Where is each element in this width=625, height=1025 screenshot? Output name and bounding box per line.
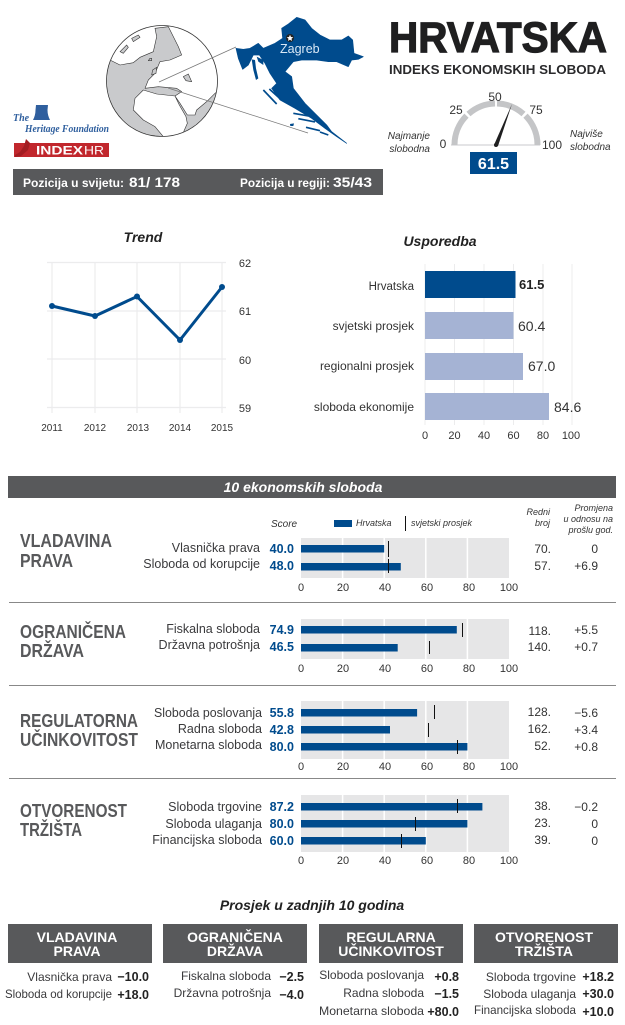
panel: Regularna učinkovitost average: +0.8 [434, 970, 459, 984]
group: Regulatorna učinkovitost: 0 [298, 761, 304, 773]
group: Ograničena država: OGRANIČENA [20, 621, 126, 642]
position bar: 81/ 178 [129, 174, 180, 190]
logo: The Heritage Foundation: Heritage Foundation [24, 124, 109, 135]
panel: Ograničena država average: OGRANIČENA [187, 928, 283, 945]
group: Regulatorna učinkovitost [20, 701, 598, 773]
bar chart: comparison: 0 [422, 430, 428, 442]
group: Ograničena država: 100 [500, 663, 518, 675]
divider [9, 602, 616, 604]
column headers: prošlu god. [567, 525, 613, 535]
column headers [526, 503, 613, 535]
panel: Otvorenost tržišta average [474, 924, 618, 1019]
bar chart: comparison: 100 [562, 430, 580, 442]
group: Vladavina prava: Sloboda od korupcije [143, 557, 260, 571]
panel: Regularna učinkovitost average: UČINKOVITOST [338, 942, 444, 959]
panel: Regularna učinkovitost average: Sloboda poslovanja [319, 968, 424, 982]
panel: Vladavina prava average: Vlasnička prava [27, 970, 112, 984]
group: Vladavina prava: Vlasnička prava [172, 541, 260, 555]
group: Vladavina prava: 0 [591, 542, 598, 556]
panel: Regularna učinkovitost average: REGULARNA [346, 929, 436, 945]
bar chart: comparison: sloboda ekonomije [314, 400, 414, 414]
group: Vladavina prava: +6.9 [574, 559, 598, 573]
panel: Vladavina prava average: PRAVA [54, 943, 100, 959]
panel: Regularna učinkovitost average: Monetarna sloboda [319, 1004, 424, 1018]
line chart: trend: 2015 [211, 423, 234, 434]
group: Vladavina prava: 48.0 [270, 559, 294, 573]
group: Ograničena država: 60 [421, 663, 433, 675]
group: Vladavina prava [20, 531, 598, 594]
logo: Index HR: HR [84, 144, 104, 158]
heading: Trend: Trend [124, 229, 163, 245]
gauge: index score 61.5: slobodna [570, 142, 611, 153]
gauge: index score 61.5: 61.5 [478, 156, 509, 173]
gauge: index score 61.5: Najviše [570, 129, 603, 140]
bar chart: comparison: 40 [478, 430, 490, 442]
line chart: trend: 62 [239, 258, 251, 270]
legend: Hrvatska [356, 518, 392, 528]
column headers: Redni [526, 507, 551, 517]
panel: Vladavina prava average: +18.0 [117, 988, 149, 1002]
bar chart: comparison: 60.4 [518, 318, 545, 334]
heading: Prosjek u zadnjih 10 godina: Prosjek u zadnjih 10 godina [220, 897, 404, 913]
group: Regulatorna učinkovitost: 20 [337, 761, 349, 773]
bar chart: comparison: regionalni prosjek [320, 359, 415, 373]
bar chart: comparison: 84.6 [554, 399, 581, 415]
gauge: index score 61.5: Najmanje [388, 131, 430, 142]
group: Regulatorna učinkovitost: Radna sloboda [178, 722, 262, 736]
line chart: trend: 2014 [169, 423, 192, 434]
group: Otvorenost tržišta: 0 [591, 834, 598, 848]
group: Ograničena država: 46.5 [270, 640, 294, 654]
panel: Otvorenost tržišta average: Financijska sloboda [474, 1003, 576, 1017]
panel: Ograničena država average: Fiskalna sloboda [181, 969, 271, 983]
gauge: index score 61.5: 50 [488, 90, 502, 104]
logo: The Heritage Foundation: The [13, 113, 30, 124]
group: Vladavina prava: 40.0 [270, 542, 294, 556]
group: Otvorenost tržišta: OTVORENOST [20, 801, 127, 821]
group: Otvorenost tržišta: TRŽIŠTA [20, 819, 82, 840]
group: Vladavina prava: 70. [534, 542, 551, 556]
group: Otvorenost tržišta: 0 [298, 855, 304, 867]
panel: Ograničena država average: −2.5 [279, 970, 304, 984]
group: Ograničena država: 80 [463, 663, 475, 675]
group: Otvorenost tržišta: 20 [337, 855, 349, 867]
group: Ograničena država: +0.7 [574, 640, 598, 654]
group: Regulatorna učinkovitost: Sloboda poslovanja [154, 706, 262, 720]
group: Ograničena država: 140. [528, 640, 551, 654]
group: Regulatorna učinkovitost: 162. [528, 722, 551, 736]
bar chart: comparison: 60 [507, 430, 520, 442]
gauge: index score 61.5: 25 [449, 103, 463, 117]
line chart: trend: 2011 [41, 423, 63, 434]
group: Regulatorna učinkovitost: 40 [379, 761, 391, 773]
group: Regulatorna učinkovitost: Monetarna sloboda [155, 738, 262, 752]
group: Otvorenost tržišta: Sloboda ulaganja [165, 817, 262, 831]
line chart: trend: 2012 [84, 423, 107, 434]
group: Otvorenost tržišta: 23. [534, 816, 551, 830]
group: Ograničena država: Državna potrošnja [159, 638, 260, 652]
panel: Regularna učinkovitost average: −1.5 [434, 987, 459, 1001]
group: Vladavina prava: 0 [298, 582, 304, 594]
group: Otvorenost tržišta: 38. [534, 799, 551, 813]
title: INDEKS EKONOMSKIH SLOBODA [389, 62, 607, 77]
line chart: trend: 2013 [127, 423, 150, 434]
panel: Regularna učinkovitost average: +80.0 [427, 1005, 459, 1019]
group: Otvorenost tržišta: 80 [463, 855, 475, 867]
panel: Otvorenost tržišta average: Sloboda ulaganja [483, 987, 576, 1001]
group: Ograničena država: 118. [529, 624, 551, 638]
group: Otvorenost tržišta: Sloboda trgovine [168, 800, 262, 814]
section header: 10 ekonomskih sloboda: 10 ekonomskih sloboda [224, 479, 383, 495]
legend: Score [271, 519, 298, 530]
group: Vladavina prava: 40 [379, 582, 391, 594]
panel: Ograničena država average: DRŽAVA [207, 942, 263, 959]
group: Regulatorna učinkovitost: 52. [534, 739, 551, 753]
divider [9, 778, 616, 780]
group: Otvorenost tržišta [20, 795, 598, 867]
bar chart: comparison: 61.5 [519, 277, 544, 292]
logo: Index HR: INDEX [36, 144, 83, 158]
panel: Otvorenost tržišta average: Sloboda trgovine [486, 970, 576, 984]
panel: Vladavina prava average: Sloboda od korupcije [5, 987, 112, 1001]
group: Otvorenost tržišta: 87.2 [270, 800, 294, 814]
connector lines from globe to map [159, 47, 308, 133]
logo: The Heritage Foundation [13, 105, 109, 135]
group: Vladavina prava: 60 [421, 582, 433, 594]
group: Regulatorna učinkovitost: REGULATORNA [20, 711, 138, 731]
bar chart: comparison: 67.0 [528, 358, 555, 374]
bar chart: comparison: svjetski prosjek [333, 319, 415, 333]
group: Regulatorna učinkovitost: 128. [528, 705, 551, 719]
group: Otvorenost tržišta: 80.0 [270, 817, 294, 831]
group: Vladavina prava: VLADAVINA [20, 531, 112, 551]
column headers: u odnosu na [563, 514, 613, 524]
heading: Usporedba: Usporedba [403, 233, 477, 249]
gauge: index score 61.5 [388, 90, 611, 174]
group: Otvorenost tržišta: −0.2 [574, 800, 598, 814]
panel: Regularna učinkovitost average: Radna sloboda [343, 986, 424, 1000]
group: Otvorenost tržišta: Financijska sloboda [152, 833, 262, 847]
panel: Regularna učinkovitost average [319, 924, 463, 1019]
line chart: trend [41, 258, 251, 434]
group: Vladavina prava: 100 [500, 582, 518, 594]
group: Otvorenost tržišta: 40 [379, 855, 391, 867]
group: Otvorenost tržišta: 100 [500, 855, 518, 867]
group: Regulatorna učinkovitost: 80.0 [270, 740, 294, 754]
group: Vladavina prava: 20 [337, 582, 349, 594]
divider [9, 684, 616, 686]
group: Regulatorna učinkovitost: 100 [500, 761, 518, 773]
group: Vladavina prava: 80 [463, 582, 475, 594]
gauge: index score 61.5: 0 [440, 137, 447, 151]
panel: Vladavina prava average: VLADAVINA [37, 929, 117, 945]
group: Ograničena država [20, 619, 598, 675]
map of Croatia [236, 17, 363, 143]
group: Ograničena država: 0 [298, 663, 304, 675]
legend: svjetski prosjek [411, 518, 473, 528]
group: Regulatorna učinkovitost: UČINKOVITOST [20, 729, 138, 750]
position bar: Pozicija u regiji: [240, 176, 330, 190]
position bar: 35/43 [333, 174, 372, 190]
group: Regulatorna učinkovitost: +0.8 [574, 740, 598, 754]
gauge: index score 61.5: 100 [542, 138, 562, 152]
column headers: Promjena [574, 503, 613, 513]
group: Otvorenost tržišta: 60 [421, 855, 433, 867]
group: Otvorenost tržišta: 0 [591, 817, 598, 831]
group: Ograničena država: +5.5 [574, 623, 598, 637]
panel: Ograničena država average: Državna potrošnja [174, 986, 271, 1000]
bar chart: comparison [314, 264, 581, 442]
group: Otvorenost tržišta: 39. [534, 833, 551, 847]
group: Regulatorna učinkovitost: 55.8 [270, 706, 294, 720]
panel: Ograničena država average [163, 924, 307, 1002]
logo: Index HR [14, 139, 109, 158]
group: Ograničena država: 20 [337, 663, 349, 675]
line chart: trend: 60 [239, 355, 251, 367]
line chart: trend: 59 [239, 403, 251, 415]
group: Ograničena država: Fiskalna sloboda [166, 622, 260, 636]
panel: Vladavina prava average: −10.0 [117, 970, 149, 984]
column headers: broj [535, 518, 551, 528]
position bar: Pozicija u svijetu: [23, 176, 124, 190]
Zagreb label: Zagreb [280, 42, 320, 56]
position bar [13, 169, 383, 195]
panel: Ograničena država average: −4.0 [279, 988, 304, 1002]
section header: 10 ekonomskih sloboda [8, 476, 616, 498]
bar chart: comparison: 20 [448, 430, 461, 442]
gauge: index score 61.5: 75 [529, 103, 543, 117]
group: Vladavina prava: 57. [534, 559, 551, 573]
group: Vladavina prava: PRAVA [20, 551, 73, 571]
group: Ograničena država: 74.9 [270, 623, 294, 637]
group: Ograničena država: 40 [379, 663, 391, 675]
line chart: trend: 61 [239, 306, 251, 318]
panel: Vladavina prava average [5, 924, 152, 1002]
group: Regulatorna učinkovitost: 60 [421, 761, 433, 773]
legend [271, 516, 473, 531]
bar chart: comparison: Hrvatska [369, 281, 415, 293]
group: Regulatorna učinkovitost: −5.6 [574, 706, 598, 720]
panel: Otvorenost tržišta average: OTVORENOST [495, 929, 593, 945]
group: Regulatorna učinkovitost: +3.4 [574, 723, 598, 737]
panel: Otvorenost tržišta average: TRŽIŠTA [515, 942, 573, 959]
group: Regulatorna učinkovitost: 80 [463, 761, 475, 773]
panel: Otvorenost tržišta average: +30.0 [582, 987, 614, 1001]
panel: Otvorenost tržišta average: +18.2 [582, 970, 614, 984]
gauge: index score 61.5: slobodna [389, 144, 430, 155]
group: Otvorenost tržišta: 60.0 [270, 834, 294, 848]
group: Ograničena država: DRŽAVA [20, 640, 84, 661]
group: Regulatorna učinkovitost: 42.8 [270, 723, 294, 737]
panel: Otvorenost tržišta average: +10.0 [582, 1005, 614, 1019]
bar chart: comparison: 80 [537, 430, 549, 442]
globe with Europe and Africa [103, 26, 218, 140]
title: HRVATSKA [389, 14, 607, 62]
